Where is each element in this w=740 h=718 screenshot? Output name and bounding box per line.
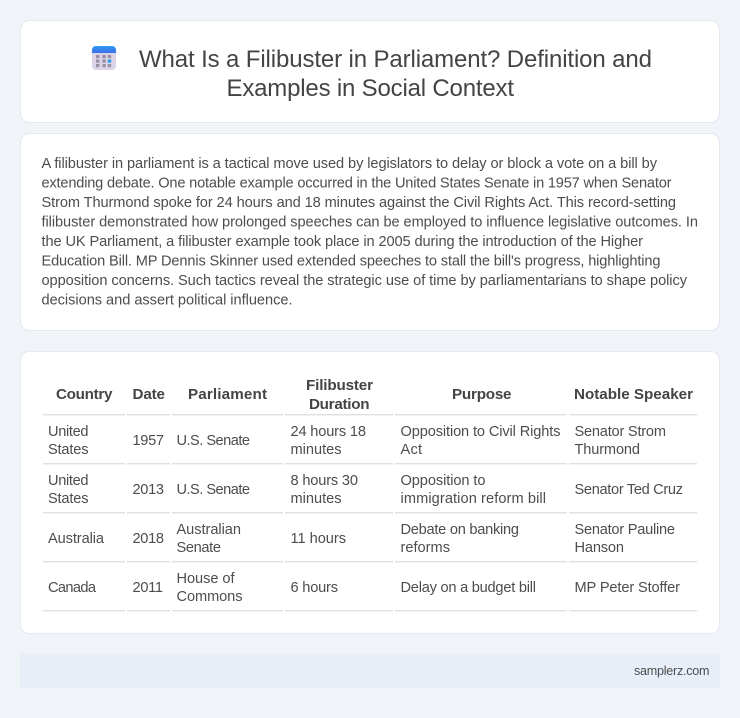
table row: Canada 2011 xyxy=(48,571,680,605)
table row: Australia 2018: Debate on banking xyxy=(400,522,519,538)
text block: definition paragraph: Education Bill. MP Dennis Skinner used extended speeches to stall the bill's progress, highlighting xyxy=(42,254,660,270)
table header row xyxy=(56,377,693,413)
table row: Canada 2011: House of xyxy=(176,571,235,587)
table row: Canada 2011: Commons xyxy=(176,589,242,605)
table row: United States 1957: 24 hours 18 xyxy=(290,424,366,440)
table row: United States 1957: Opposition to Civil Rights xyxy=(400,424,560,440)
title: Examples in Social Context xyxy=(226,75,514,102)
table header row: Parliament xyxy=(188,386,267,403)
table row: United States 1957: 1957 xyxy=(132,433,164,449)
text block: definition paragraph: the UK Parliament, a filibuster example took place in 2005 during the introduction of the Higher xyxy=(42,234,643,250)
table row: Canada 2011: 2011 xyxy=(132,580,163,596)
table row: United States 2013: U.S. Senate xyxy=(176,482,250,498)
text block: definition paragraph: Strom Thurmond spoke for 24 hours and 18 minutes against the Civil Rights Act. This record-setting xyxy=(42,195,676,211)
icon: calendar xyxy=(92,46,116,70)
table row: Australia 2018: Senator Pauline xyxy=(574,522,675,538)
table row: Canada 2011: 6 hours xyxy=(290,580,338,596)
table row: Australia 2018 xyxy=(48,522,675,556)
table row: United States 1957: Act xyxy=(400,442,422,458)
text block: definition paragraph xyxy=(42,156,698,308)
table row: Australia 2018: Australia xyxy=(48,531,105,547)
table row: Canada 2011: Canada xyxy=(48,580,97,596)
text block: definition paragraph: opposition concerns. Such tactics reveal the strategic use of time by parliamentarians to shape policy xyxy=(42,273,688,289)
footer credit: samplerz.com xyxy=(634,664,710,678)
table row: Australia 2018: 11 hours xyxy=(290,531,346,547)
table row: Australia 2018: Australian xyxy=(176,522,241,538)
table row: Australia 2018: 2018 xyxy=(132,531,164,547)
table row: United States 2013: United xyxy=(48,473,88,489)
table row: United States 2013: 2013 xyxy=(132,482,164,498)
panel: definition text xyxy=(20,134,720,330)
title xyxy=(139,46,652,102)
table row: Australia 2018: Hanson xyxy=(574,540,624,556)
title: What Is a Filibuster in Parliament? Definition and xyxy=(139,46,652,73)
table row: United States 1957: United xyxy=(48,424,88,440)
table row: United States 2013: Opposition to xyxy=(400,473,486,489)
text block: definition paragraph: A filibuster in parliament is a tactical move used by legislators to delay or block a vote on a bill by xyxy=(42,156,658,172)
table row: United States 2013: immigration reform bill xyxy=(400,491,546,507)
table header row: Purpose xyxy=(452,386,512,403)
table header row: Notable Speaker xyxy=(574,386,693,403)
table row: United States 2013: States xyxy=(48,491,88,507)
footer bar xyxy=(20,654,720,688)
text block: definition paragraph: extending debate. One notable example occurred in the United States Senate in 1957 when Senator xyxy=(42,176,672,192)
table row: United States 1957: Senator Strom xyxy=(574,424,666,440)
table row: United States 1957 xyxy=(48,424,666,458)
panel: title header xyxy=(20,20,720,122)
table header row: Duration xyxy=(309,396,370,413)
table row: United States 1957: States xyxy=(48,442,88,458)
table header row: Country xyxy=(56,386,113,403)
table header row: Date xyxy=(132,386,165,403)
panel: filibuster table xyxy=(20,352,720,634)
table row: United States 2013: 8 hours 30 xyxy=(290,473,358,489)
table row: United States 2013 xyxy=(48,473,683,507)
table row: Australia 2018: reforms xyxy=(400,540,450,556)
table header row: Filibuster xyxy=(306,377,373,394)
table row: Canada 2011: Delay on a budget bill xyxy=(400,580,536,596)
table row: Canada 2011: MP Peter Stoffer xyxy=(574,580,680,596)
table row: United States 1957: minutes xyxy=(290,442,342,458)
text block: definition paragraph: decisions and assert political influence. xyxy=(42,292,292,308)
table row: Australia 2018: Senate xyxy=(176,540,221,556)
text block: definition paragraph: filibuster demonstrated how prolonged speeches can be employed to influence legislative outcomes. In xyxy=(42,214,698,230)
table row: United States 2013: minutes xyxy=(290,491,342,507)
table row: United States 1957: U.S. Senate xyxy=(176,433,250,449)
table row: United States 1957: Thurmond xyxy=(574,442,640,458)
table row: United States 2013: Senator Ted Cruz xyxy=(574,482,683,498)
